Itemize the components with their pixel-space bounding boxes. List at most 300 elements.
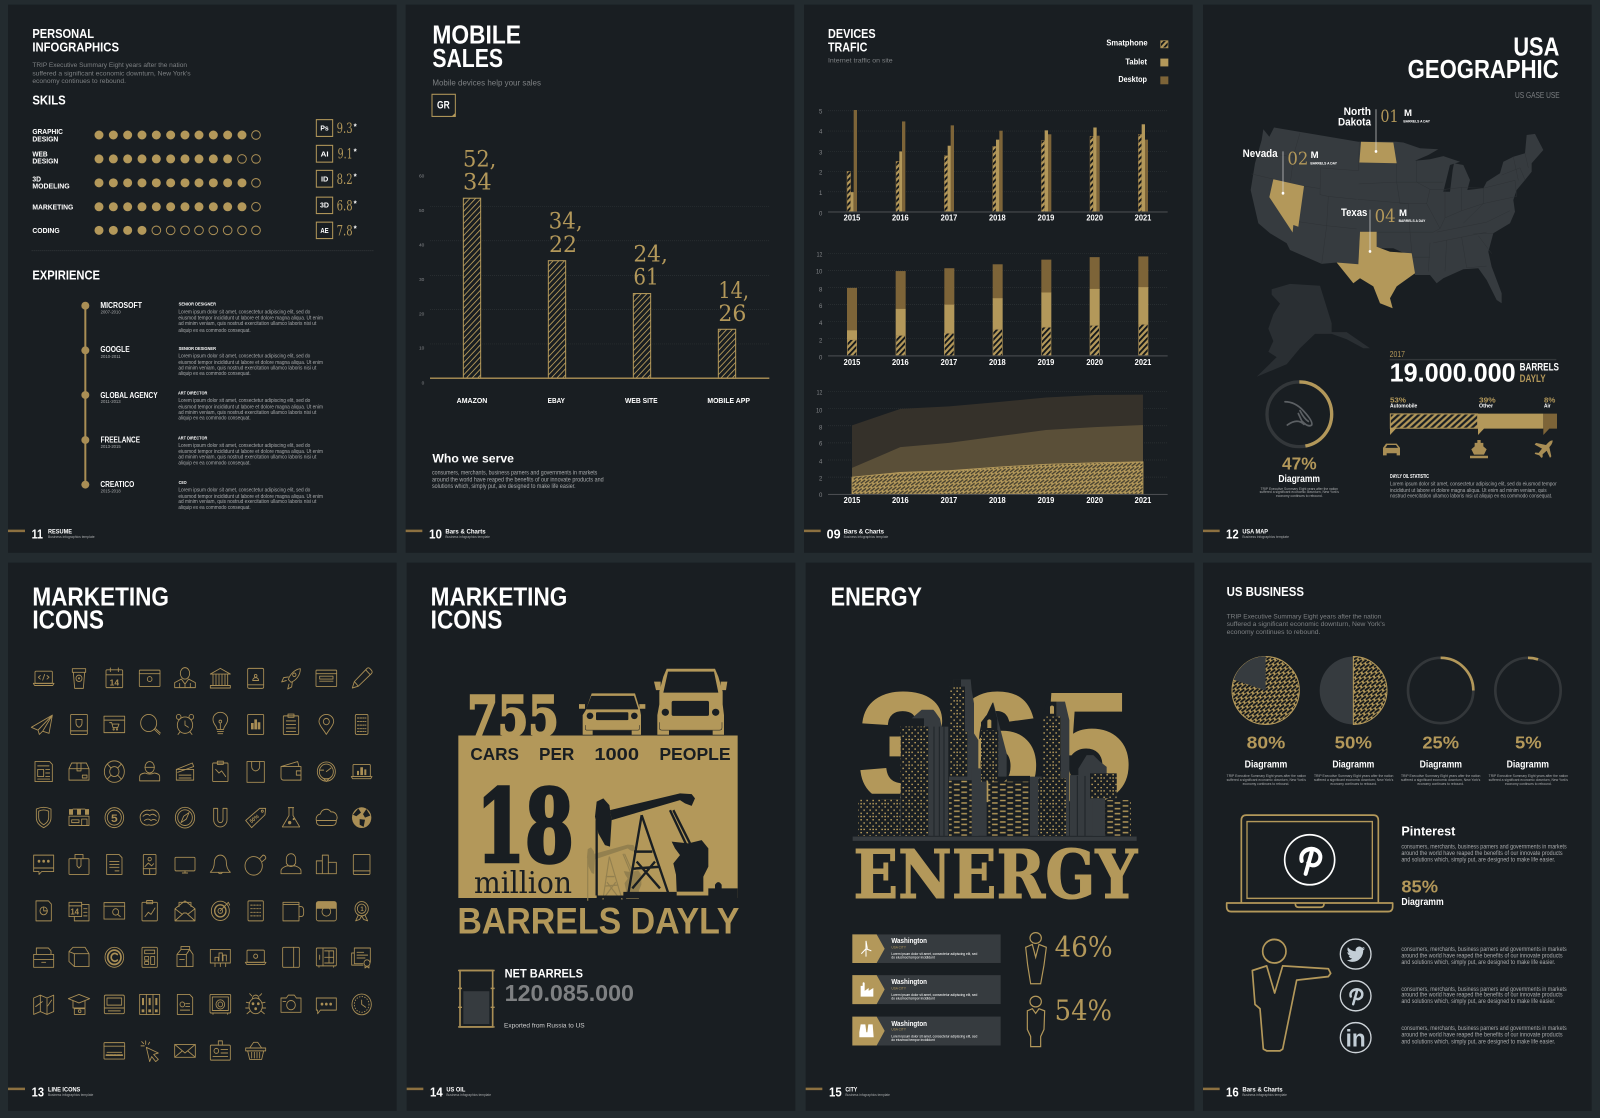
- stat: female 54%: [1027, 995, 1112, 1047]
- icon: phone image: [143, 854, 156, 874]
- title: GEOGRAPHIC: [1408, 55, 1559, 84]
- text block: pinterest: Pinterest: [1401, 824, 1455, 839]
- footer: page 10: 10: [429, 527, 442, 542]
- icon: laptop with pinterest logo: [1227, 815, 1393, 912]
- text block: pinterest: around the world have reaped the benefits of our innovate products: [1401, 851, 1563, 857]
- role descriptions: SENIOR DESIGNER: [179, 302, 217, 307]
- footer: page 12: Business infographics template: [1242, 535, 1289, 539]
- companies and years: CREATICO: [100, 480, 134, 489]
- text block: social two: [1401, 987, 1567, 1005]
- chart: stacked bars: 8: [819, 286, 823, 293]
- companies and years: 2013-2015: [101, 444, 121, 449]
- skill labels: WEB: [32, 149, 48, 158]
- bar chart: 34: [463, 169, 492, 196]
- bar chart: 24,: [633, 241, 668, 268]
- list row: power plant: USA CITY: [891, 1027, 906, 1032]
- text block: social two: around the world have reaped the benefits of our innovate products: [1401, 992, 1563, 999]
- icon: car: [1383, 444, 1400, 455]
- icon: safe: [210, 994, 231, 1014]
- bar chart: EBAY: [548, 396, 565, 405]
- icon: package: [69, 763, 89, 780]
- footer: page 12: USA MAP: [1242, 528, 1268, 536]
- donut chart: 47%: TRIP Executive Summary Eight years after the nation: [1261, 487, 1338, 491]
- icon: lifebuoy: [104, 761, 124, 782]
- icon: speech bubble: [316, 998, 336, 1014]
- footer: page 10: Bars & Charts: [445, 528, 486, 536]
- text block: daily oil statistic: [1390, 474, 1557, 500]
- title: MARKETING: [32, 583, 169, 612]
- callout: texas: [1341, 207, 1426, 253]
- chart: grouped bars: 1: [819, 190, 823, 197]
- intro text: TRIP Executive Summary Eight years after the nation: [32, 62, 187, 69]
- panel: mobile sales: [406, 5, 794, 553]
- footer: page 09: Business infographics template: [844, 535, 889, 539]
- caption: barrels dayly: BARRELS DAYLY: [457, 900, 739, 942]
- text block: social one: consumers, merchants, business parners and governments in markets: [1401, 947, 1567, 953]
- role descriptions: Lorem ipsum dolor sit amet, consectetur adipiscing elit, sed do: [178, 398, 311, 404]
- heading: energy: ENERGY: [853, 835, 1138, 915]
- ring chart: 5%: suffered a significant economic downturn, New York's: [1489, 778, 1568, 782]
- role descriptions: ad minim veniam, quis nostrud exercitation ullamco laboris nisi ut: [178, 499, 317, 505]
- callout: north dakota: Dakota: [1338, 117, 1371, 128]
- role descriptions: aliquip ex ea commodo consequat.: [178, 416, 251, 422]
- list row: wind power: Washington: [891, 938, 927, 945]
- software badges and scores: *: [354, 121, 358, 131]
- icon: folded map: [34, 995, 54, 1014]
- icon: tablet bars: [248, 714, 264, 734]
- software badges and scores: AI: [321, 151, 329, 158]
- footer: page 10: [406, 527, 490, 542]
- icon: pinterest: [1340, 981, 1371, 1011]
- panel: energy: [806, 563, 1194, 1111]
- icon: browser search: [104, 903, 125, 919]
- role descriptions: ad minim veniam, quis nostrud exercitation ullamco laboris nisi ut: [178, 365, 317, 371]
- list row: power plant: do eiusmod tempor incididunt: [891, 1038, 935, 1042]
- text block: daily oil statistic: nostrud exercitation ullamco laboris nisi ut aliquip ex ea commodo consequat.: [1390, 493, 1552, 500]
- pie chart: 80%: suffered a significant economic downturn, New York's: [1227, 778, 1306, 782]
- icon: van: [654, 669, 727, 735]
- text block: social one: around the world have reaped the benefits of our innovate products: [1401, 953, 1563, 959]
- role descriptions: aliquip ex ea commodo consequat.: [178, 505, 251, 511]
- text block: who we serve: solutions which, simply put, are designed to make life easier.: [432, 484, 576, 490]
- callout: texas: M: [1399, 208, 1407, 218]
- companies and years: 2007-2010: [101, 309, 121, 315]
- big number: barrels: 19.000.000: [1390, 359, 1516, 388]
- big number: barrels: 2017: [1390, 350, 1405, 359]
- pie chart: 50%: [1314, 657, 1394, 786]
- footer: page 13: [8, 1085, 94, 1100]
- subtitle: Mobile devices help your sales: [432, 77, 541, 87]
- role descriptions: aliquip ex ea commodo consequat.: [178, 460, 251, 466]
- icon: five coin: [105, 808, 124, 828]
- segmented bar: transport share: 8%: [1544, 395, 1556, 405]
- caption: cars per 1000 people: PER: [539, 744, 575, 764]
- icon: newspaper: [35, 762, 52, 782]
- callout: north dakota: [1338, 107, 1431, 153]
- chart: grouped bars: 2: [819, 169, 823, 176]
- text block: social three: [1401, 1026, 1567, 1045]
- icon: brain: [140, 810, 159, 825]
- chart: stacked bars: 6: [819, 303, 823, 310]
- footer: page 10: Business infographics template: [445, 535, 490, 539]
- ring chart: 5%: TRIP Executive Summary Eight years after the nation: [1489, 774, 1568, 778]
- companies and years: 2015-2018: [101, 488, 121, 494]
- panel: usa geographic: [1203, 5, 1592, 553]
- icon: notebook: [283, 947, 299, 967]
- chart: grouped bars: 2018: [989, 213, 1006, 223]
- list row: factory: [852, 975, 1001, 1004]
- icon: security book: [71, 714, 87, 734]
- text block: social three: consumers, merchants, business parners and governments in markets: [1401, 1026, 1567, 1032]
- intro text: economy continues to rebound.: [1227, 629, 1321, 636]
- footer: page 14: [407, 1085, 491, 1100]
- icon: medal: [355, 902, 368, 921]
- ring chart: 5%: economy continues to rebound.: [1505, 782, 1552, 786]
- chart: area: 8: [819, 424, 823, 431]
- footer: page 13: LINE ICONS: [48, 1086, 80, 1094]
- icon: tablet profile: [248, 668, 264, 688]
- segmented bar: transport share: 39%: [1479, 395, 1496, 405]
- icon: copyright coin: [105, 947, 124, 967]
- title: INFOGRAPHICS: [32, 40, 119, 55]
- software badges and scores: *: [354, 223, 358, 233]
- bar chart: 20: [419, 311, 425, 316]
- caption: cars per 1000 people: 1000: [594, 744, 639, 764]
- role descriptions: ad minim veniam, quis nostrud exercitation ullamco laboris nisi ut: [178, 410, 317, 416]
- chart: area: 4: [819, 458, 823, 466]
- icon: certificate: [352, 948, 370, 968]
- icon: cloud: [316, 809, 337, 825]
- title: [32, 583, 169, 635]
- icon: clapperboard: [176, 763, 194, 780]
- skill labels: DESIGN: [32, 134, 58, 143]
- callout: nevada: BARRELS A DAY: [1310, 161, 1338, 165]
- icon: printer: [34, 948, 54, 967]
- icon: calendar: 14: [110, 677, 119, 688]
- stat: net barrels: [504, 967, 634, 1030]
- ring chart: 5%: Diagramm: [1507, 759, 1549, 771]
- bar chart: 34,: [549, 208, 583, 235]
- text block: social two: consumers, merchants, business parners and governments in markets: [1401, 987, 1567, 993]
- icon: target: [211, 901, 230, 920]
- icon: browser window: [316, 670, 337, 687]
- legend: Smatphone: [1106, 38, 1148, 48]
- icon: flask: [282, 808, 300, 827]
- skill labels: MODELING: [32, 181, 70, 191]
- icon: graduation cap: [68, 994, 90, 1014]
- chart: grouped bars: 2020: [1086, 213, 1103, 223]
- text block: pinterest: [1401, 824, 1567, 908]
- icon: price tag: [246, 808, 266, 828]
- software badges and scores: ID: [321, 176, 328, 183]
- icon: globe: [352, 807, 371, 828]
- icon: wallet: [281, 762, 301, 780]
- bar chart: 50: [419, 208, 425, 213]
- footer: page 09: 09: [827, 527, 841, 542]
- pie chart: 80%: TRIP Executive Summary Eight years after the nation: [1227, 774, 1306, 778]
- icon: linkedin: [1340, 1023, 1371, 1053]
- footer: page 16: Business infographics template: [1242, 1093, 1287, 1097]
- icon: calculator grid: [248, 901, 263, 921]
- chart: stacked bars: 2021: [1135, 358, 1151, 367]
- chart: stacked bars: 2020: [1086, 358, 1103, 367]
- pie chart: 50%: TRIP Executive Summary Eight years after the nation: [1314, 774, 1394, 778]
- footer: page 14: 14: [430, 1085, 443, 1100]
- caption: cars per 1000 people: PEOPLE: [659, 744, 731, 764]
- icon: clipboard trend: [213, 761, 228, 782]
- panel: personal infographics: [8, 5, 397, 553]
- icon: binders: [140, 994, 160, 1014]
- number: 18 million: 18: [476, 767, 574, 885]
- chart: area: 2018: [989, 496, 1006, 505]
- icon: compass: [175, 807, 195, 828]
- bar chart: 40: [419, 242, 425, 247]
- software badges and scores: 7.8: [337, 224, 353, 240]
- title: MOBILE: [432, 21, 521, 50]
- chart: stacked bars: 2019: [1038, 358, 1054, 367]
- footer: page 15: CITY: [845, 1086, 858, 1094]
- callout: north dakota: M: [1404, 108, 1412, 118]
- ring chart: 25%: TRIP Executive Summary Eight years after the nation: [1401, 774, 1481, 778]
- panel: devices traffic: [804, 5, 1193, 553]
- number: 755: 755: [467, 685, 559, 748]
- title: ICONS: [32, 606, 104, 635]
- role descriptions: eiusmod tempor incididunt ut labore et dolore magna aliqua. Ut enim: [178, 360, 323, 366]
- title: US GASE USE: [1515, 91, 1560, 100]
- panel: us business: [1203, 563, 1592, 1111]
- icon: laptop code: [33, 671, 54, 685]
- callout: nevada: [1243, 149, 1338, 195]
- chart: area: 2015: [844, 496, 860, 505]
- bar chart: AMAZON: [457, 396, 487, 405]
- software badges and scores: 9.1: [338, 147, 353, 163]
- icon: id badge: [210, 1041, 230, 1060]
- icon: location pin: [319, 714, 334, 734]
- ring chart: 25%: suffered a significant economic downturn, New York's: [1401, 778, 1481, 782]
- big number: barrels: BARRELS: [1520, 362, 1559, 374]
- panel: us oil: [407, 563, 795, 1111]
- role descriptions: aliquip ex ea commodo consequat.: [178, 328, 251, 334]
- chart: stacked bars: [816, 251, 1168, 367]
- bar chart: 10: [419, 346, 425, 351]
- role descriptions: ART DIRECTOR: [178, 435, 208, 440]
- text block: who we serve: consumers, merchants, business parners and governments in markets: [432, 471, 597, 477]
- software badges and scores: 9.3: [337, 122, 353, 137]
- software badges and scores: *: [354, 198, 358, 208]
- icon: car: [579, 693, 645, 735]
- bar chart: 22: [549, 231, 577, 258]
- icon: storefront: [69, 809, 89, 825]
- footer: page 16: [1203, 1085, 1287, 1100]
- callout: texas: BARRELS A DAY: [1399, 219, 1426, 223]
- chart: stacked bars: 12: [817, 251, 823, 258]
- list row: wind power: [852, 934, 1001, 963]
- title: ICONS: [431, 606, 502, 635]
- software badges and scores: 3D: [320, 200, 329, 210]
- title: ENERGY: [831, 583, 922, 612]
- chart: area: [816, 389, 1168, 505]
- icon: rocket: [282, 669, 300, 689]
- skill rating dots: [94, 130, 260, 235]
- callout: texas: Texas: [1341, 208, 1368, 219]
- role descriptions: ART DIRECTOR: [178, 391, 208, 396]
- role descriptions: ad minim veniam, quis nostrud exercitation ullamco laboris nisi ut: [178, 321, 317, 327]
- text block: pinterest: and solutions which, simply put, are designed to make life easier.: [1401, 857, 1556, 864]
- footer: page 09: Bars & Charts: [844, 528, 885, 536]
- icon: 3d box: [69, 947, 89, 967]
- title: [432, 21, 521, 73]
- chart: area: 12: [817, 389, 823, 396]
- ring chart: 5%: [1489, 658, 1568, 786]
- icon: person headset: [140, 762, 160, 781]
- segmented bar: transport share: Air: [1544, 403, 1551, 410]
- companies and years: 2011-2013: [101, 399, 121, 404]
- footer: page 16: 16: [1226, 1085, 1239, 1100]
- icon: paper plane: [31, 715, 52, 734]
- chart: grouped bars: 3: [819, 149, 823, 156]
- chart: stacked bars: 2: [819, 337, 823, 345]
- footer: page 13: Business infographics template: [48, 1093, 94, 1097]
- intro text: suffered a significant economic downturn, New York's: [1227, 621, 1386, 628]
- icon: ship: [1470, 440, 1488, 458]
- list row: factory: Lorem ipsum dolor sit amet, consectetur adipiscing elit, sed: [891, 993, 977, 997]
- chart: grouped bars: 5: [819, 108, 823, 116]
- stat: net barrels: 120.085.000: [505, 980, 634, 1006]
- icon: calendar document: [69, 902, 89, 921]
- icon: magnifier: [141, 714, 160, 734]
- pie chart: 80%: economy continues to rebound.: [1243, 782, 1289, 786]
- icon: dashboard gauge: [317, 762, 335, 782]
- icon: linkedin: in: [1346, 1025, 1366, 1052]
- donut chart: 47%: economy continues to rebound.: [1276, 494, 1323, 498]
- role descriptions: eiusmod tempor incididunt ut labore et dolore magna aliqua. Ut enim: [178, 494, 323, 500]
- ring chart: 25%: [1401, 658, 1481, 786]
- callout: nevada: M: [1311, 150, 1319, 160]
- legend: Desktop: [1118, 75, 1147, 84]
- gold block: [458, 735, 738, 898]
- skill labels: DESIGN: [32, 156, 58, 166]
- intro text: [32, 62, 191, 85]
- chart: grouped bars: [819, 108, 1168, 223]
- title: USA: [1513, 33, 1559, 62]
- chart: area: 2: [819, 475, 823, 482]
- role descriptions: eiusmod tempor incididunt ut labore et dolore magna aliqua. Ut enim: [178, 316, 323, 322]
- list row: factory: USA CITY: [891, 986, 906, 990]
- heading: skills: SKILS: [32, 93, 66, 107]
- chart: stacked bars: 10: [816, 268, 823, 276]
- icon: phone keypad: [355, 714, 368, 734]
- companies and years: GLOBAL AGENCY: [100, 391, 158, 400]
- intro text: TRIP Executive Summary Eight years after the nation: [1227, 614, 1382, 621]
- footer: page 15: [806, 1085, 890, 1100]
- text block: who we serve: Who we serve: [432, 452, 514, 466]
- icon: alarm clock: [176, 714, 194, 734]
- icon: basket: [246, 1042, 266, 1059]
- text block: pinterest: Diagramm: [1401, 897, 1444, 908]
- icon: browser target: [139, 670, 160, 687]
- footer: page 14: US OIL: [446, 1086, 466, 1094]
- stat: net barrels: NET BARRELS: [505, 967, 583, 981]
- text block: social three: and solutions which, simply put, are designed to make life easier.: [1401, 1039, 1556, 1045]
- stat: male 46%: 46%: [1055, 932, 1113, 964]
- title: US BUSINESS: [1227, 584, 1304, 599]
- list row: power plant: [852, 1017, 1001, 1045]
- icon: twitter: [1340, 939, 1371, 969]
- chart: area: 2020: [1086, 496, 1103, 505]
- ring chart: 25%: 25%: [1422, 732, 1459, 753]
- role descriptions: ad minim veniam, quis nostrud exercitation ullamco laboris nisi ut: [178, 454, 317, 461]
- role descriptions: Lorem ipsum dolor sit amet, consectetur adipiscing elit, sed do: [178, 353, 311, 360]
- icon: bank: [210, 668, 230, 688]
- skill labels: GRAPHIC: [32, 127, 64, 136]
- ring chart: 25%: economy continues to rebound.: [1417, 782, 1464, 786]
- caption: cars per 1000 people: [470, 744, 731, 764]
- chart: grouped bars: 2021: [1135, 213, 1151, 223]
- text block: pinterest: consumers, merchants, business parners and governments in markets: [1401, 844, 1567, 850]
- footer: page 09: [804, 527, 889, 542]
- icon: envelope: [175, 1044, 195, 1057]
- skill labels: MARKETING: [32, 202, 74, 211]
- icon: mug: [283, 902, 304, 921]
- illustration: city skyline: [853, 679, 1137, 841]
- chart: stacked bars: 2018: [989, 358, 1006, 367]
- title: TRAFIC: [828, 40, 867, 55]
- icon: bell: [210, 855, 230, 874]
- stat: female 54%: 54%: [1055, 995, 1112, 1027]
- title: [32, 27, 119, 55]
- skill labels: 3D: [32, 174, 41, 183]
- text block: who we serve: [432, 452, 604, 490]
- icon: light bulb: [213, 712, 228, 734]
- chart: stacked bars: 2017: [941, 358, 957, 367]
- footer: page 12: [1203, 527, 1289, 542]
- footer: page 14: Business infographics template: [446, 1093, 491, 1097]
- badge: [432, 94, 455, 116]
- text block: social two: and solutions which, simply put, are designed to make life easier.: [1401, 999, 1556, 1005]
- badge: GR: [437, 99, 450, 112]
- icon: barrel: [458, 970, 495, 1027]
- callout: texas: 04: [1375, 207, 1396, 227]
- icon: calculator: [142, 947, 157, 967]
- text block: who we serve: around the world have reaped the benefits of our innovate products and: [432, 477, 604, 483]
- role descriptions: eiusmod tempor incididunt ut labore et dolore magna aliqua. Ut enim: [178, 449, 323, 455]
- chart: area: 2017: [941, 496, 957, 505]
- icon: clipboard growth: [142, 900, 157, 921]
- text block: social one: [1401, 947, 1567, 966]
- list row: factory: Washington: [891, 979, 927, 986]
- pie chart: 50%: 50%: [1335, 732, 1372, 753]
- title: [431, 583, 567, 635]
- experience timeline: [81, 302, 89, 489]
- pie chart: 50%: Diagramm: [1332, 759, 1374, 771]
- pie chart: 80%: Diagramm: [1245, 759, 1287, 771]
- list row: factory: do eiusmod tempor incididunt: [891, 996, 935, 1000]
- icon: cursor click: [141, 1041, 158, 1062]
- callout: nevada: 02: [1287, 149, 1308, 169]
- pie chart: 50%: economy continues to rebound.: [1330, 782, 1377, 786]
- bar chart: 0: [422, 380, 425, 385]
- callout: nevada: Nevada: [1243, 149, 1278, 160]
- chart: grouped bars: 2019: [1038, 213, 1054, 223]
- bar chart: 14,: [718, 277, 749, 304]
- chart: area: 2019: [1038, 496, 1054, 505]
- icon: web cart: [104, 716, 125, 733]
- icon: report pie: [36, 901, 51, 921]
- icon: clipboard list: [283, 714, 299, 734]
- icon: woman: [281, 854, 301, 874]
- footer: page 15: Business infographics template: [845, 1093, 890, 1097]
- ring chart: 5%: 5%: [1515, 732, 1542, 753]
